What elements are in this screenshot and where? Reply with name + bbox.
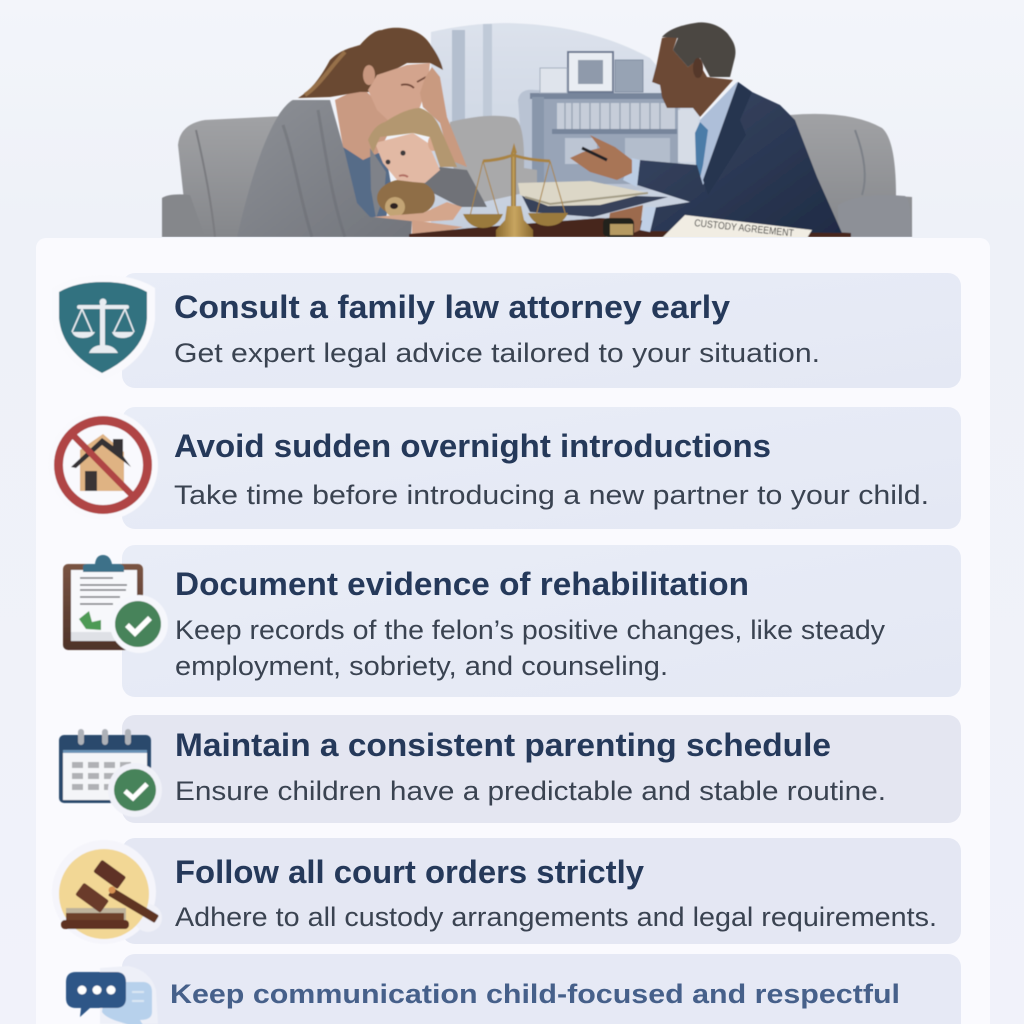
custody agreement document: CUSTODY AGREEMENT: [694, 218, 794, 239]
woman: [237, 28, 467, 237]
tip 3: document rehabilitation: [63, 545, 961, 697]
tip 3 description: [175, 615, 886, 681]
tip 1 panel: [122, 273, 961, 388]
tip 3 description: Keep records of the felon’s positive changes, like steady: [175, 615, 886, 645]
tip 3 description: employment, sobriety, and counseling.: [175, 651, 668, 681]
tip 2 description: Take time before introducing a new partner to your child.: [174, 480, 929, 510]
tip 2: avoid overnight introductions: [48, 407, 961, 529]
tip 3 heading: Document evidence of rehabilitation: [175, 566, 749, 602]
icon: speech bubbles: [66, 966, 158, 1024]
icon: shield with scales: [52, 275, 155, 381]
icon: no house symbol: [48, 410, 158, 520]
tip 2 panel: [122, 407, 961, 529]
desk with books: [409, 181, 851, 237]
tip 6 heading: Keep communication child-focused and respectful: [170, 979, 900, 1009]
tip 5 heading: Follow all court orders strictly: [175, 854, 644, 890]
right sofa: [790, 114, 912, 237]
icon: clipboard with check: [63, 555, 168, 653]
icon: gavel on yellow disc: [52, 840, 162, 944]
icon: calendar with check: [59, 732, 162, 817]
girl with teddy bear: [368, 108, 487, 234]
tip 2 heading: Avoid sudden overnight introductions: [174, 428, 771, 464]
brass scales of justice: [463, 143, 568, 237]
tip 5 description: Adhere to all custody arrangements and legal requirements.: [175, 902, 937, 932]
tip 4: consistent schedule: [59, 715, 961, 823]
illustration: custody consultation scene: [162, 22, 912, 239]
left sofa: [162, 116, 537, 237]
tip 1: consult attorney: [52, 273, 961, 388]
office backdrop with bookshelf: [431, 23, 700, 237]
main card: [36, 238, 990, 1024]
tip 1 description: Get expert legal advice tailored to your situation.: [174, 338, 820, 368]
man in suit: [570, 22, 842, 237]
tip 4 panel: [122, 715, 961, 823]
tip 6 panel: [122, 954, 961, 1024]
tip 5 panel: [122, 838, 961, 944]
tip 6: child-focused communication: [66, 954, 961, 1024]
tip 1 heading: Consult a family law attorney early: [174, 289, 730, 325]
tip 4 heading: Maintain a consistent parenting schedule: [175, 727, 831, 763]
small gavel block on desk: [603, 218, 634, 237]
tip 4 description: Ensure children have a predictable and stable routine.: [175, 776, 886, 806]
tip 3 panel: [122, 545, 961, 697]
custody agreement document: [662, 215, 812, 239]
tip 5: follow court orders: [52, 838, 961, 944]
